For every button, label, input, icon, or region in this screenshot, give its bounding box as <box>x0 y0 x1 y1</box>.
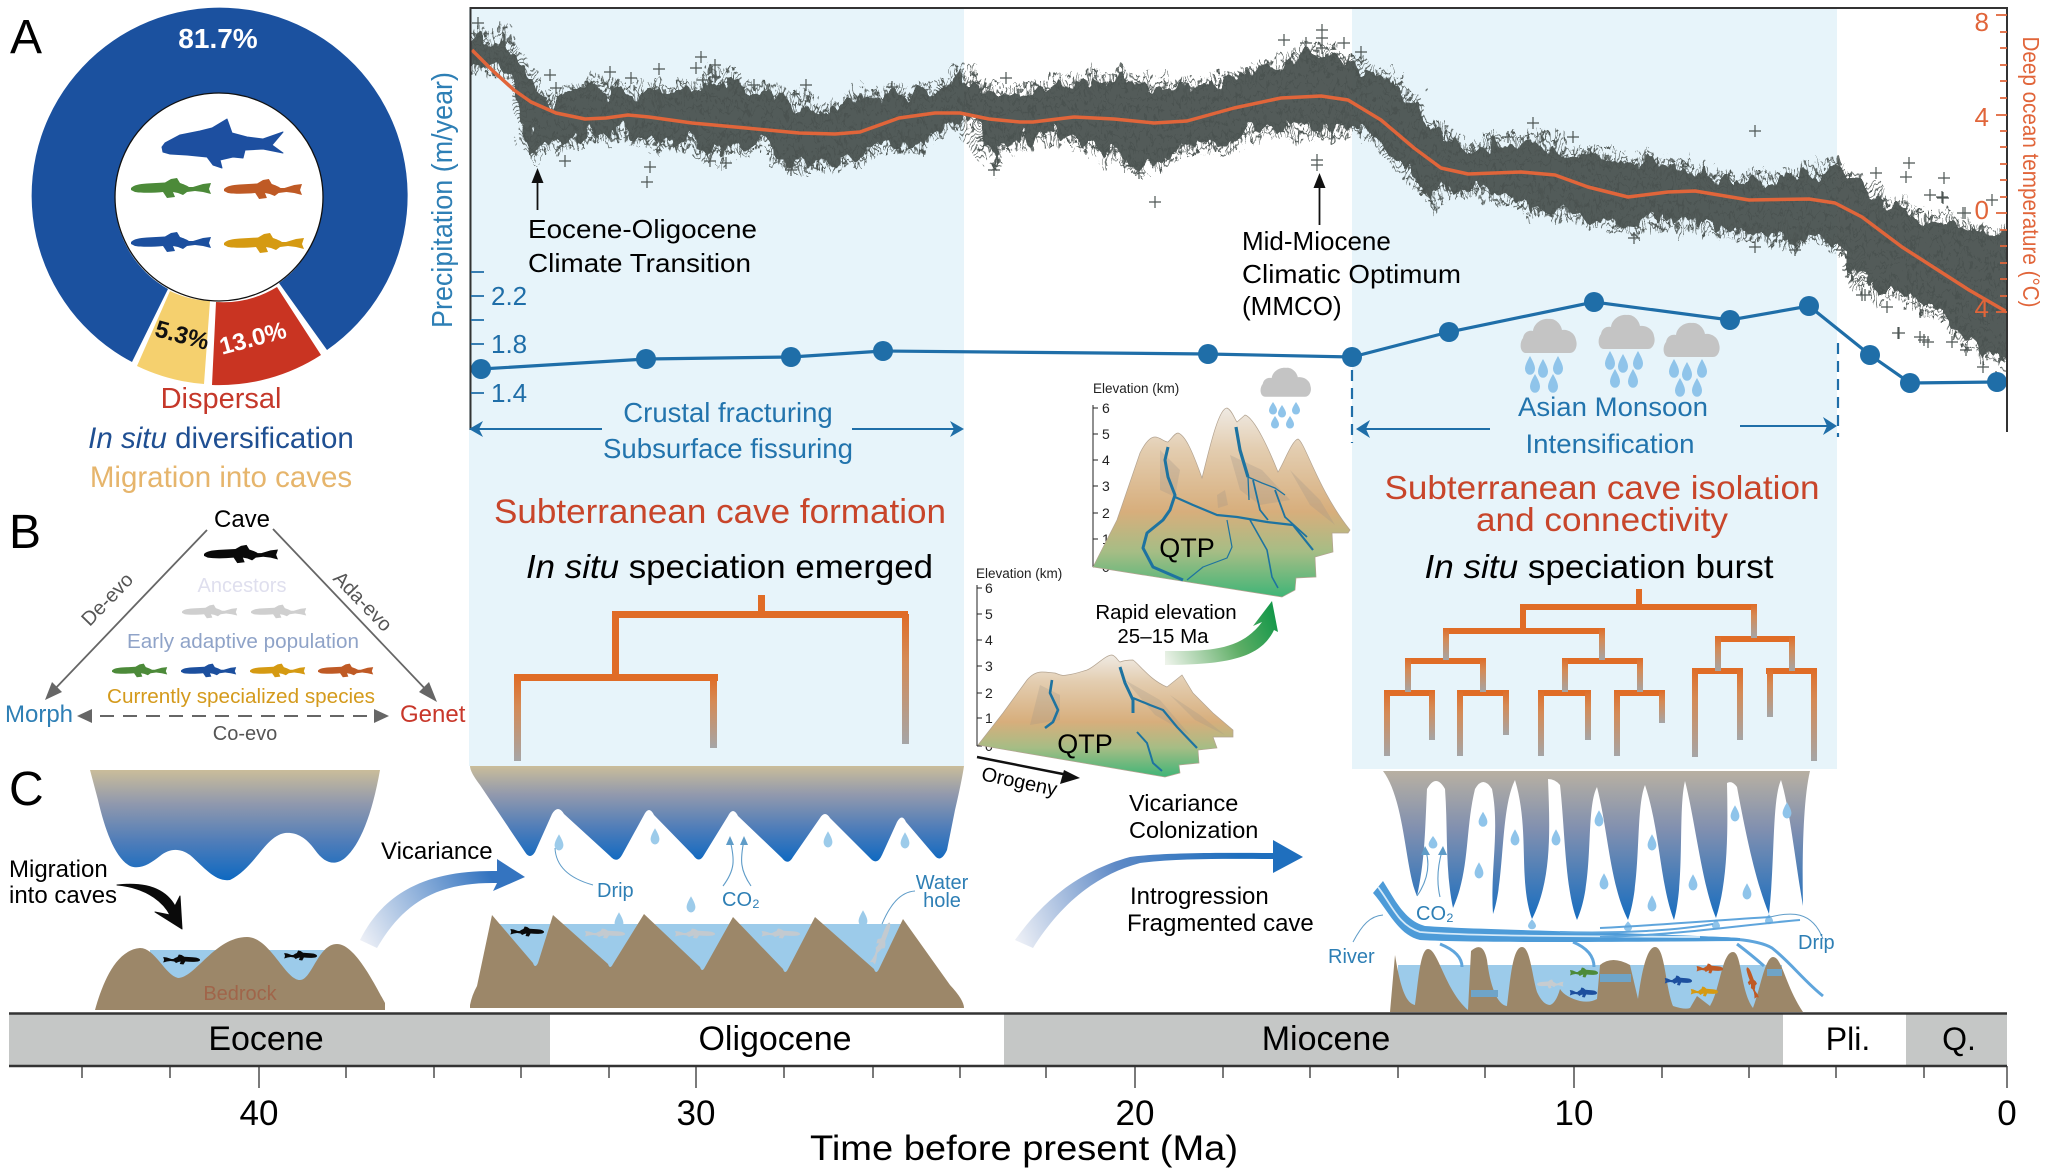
elevation axis: 2 <box>985 685 993 701</box>
bedrock <box>470 914 964 1008</box>
panel A: donut chart and legend <box>10 8 408 494</box>
chart frame <box>470 8 2007 432</box>
elevation axis: 2 <box>1102 505 1110 521</box>
temperature axis <box>1975 7 2007 323</box>
elevation axis: Elevation (km) <box>1093 381 1179 396</box>
percent label 81.7: 81.7% <box>178 23 258 54</box>
donut wedge: migration into caves 5.3% <box>137 291 210 384</box>
arrow: vicariance <box>360 838 525 948</box>
arrow: Ada-evo <box>273 529 437 702</box>
annotation: Mid-Miocene Climatic Optimum: Mid-Miocene <box>1242 226 1391 256</box>
icon: large blue fish <box>162 119 283 168</box>
elevation axis: 1 <box>1102 531 1110 547</box>
icons: specialized fish <box>112 664 373 677</box>
time axis labels: 0 <box>1997 1094 2017 1133</box>
icon: green fish <box>131 178 211 198</box>
shaded period: cave formation <box>469 8 964 766</box>
arrow: migration <box>117 884 182 929</box>
legend: dispersal: Dispersal <box>161 383 281 415</box>
percent label 5.3: 5.3% <box>152 316 212 356</box>
label: bedrock: Bedrock <box>203 983 278 1005</box>
fish in water <box>1537 964 1761 999</box>
heading: subterranean cave isolation: and connectivity <box>1476 502 1728 539</box>
panel: uplift of the plateau, lower mountain <box>976 566 1278 801</box>
donut centre circle <box>115 93 323 301</box>
arrow: rapid elevation <box>1165 601 1278 665</box>
ridge shading <box>1030 680 1225 735</box>
text: introgression fragmented cave: Fragmented cave <box>1127 910 1314 937</box>
arrow: orogeny: Orogeny <box>979 763 1059 801</box>
span arrow: crustal fracturing: Crustal fracturing <box>623 397 833 428</box>
time axis labels: 30 <box>677 1094 715 1133</box>
temperature axis: 8 <box>1975 7 1989 37</box>
span arrow: Asian monsoon intensification <box>1352 343 1838 459</box>
time axis labels: 40 <box>240 1094 278 1133</box>
epoch: Miocene <box>1004 1013 1783 1066</box>
precipitation axis: 2.2 <box>491 281 527 311</box>
icon: rain cloud <box>1261 368 1311 428</box>
label: water hole <box>882 872 969 924</box>
icon: rain clouds <box>1521 315 1720 397</box>
elevation axis: 5 <box>985 606 993 622</box>
label: QTP: QTP <box>1057 729 1113 759</box>
mountain silhouette <box>978 655 1233 777</box>
legend: in situ diversification: In situ diversification <box>88 422 354 455</box>
panel letter A: A <box>10 11 42 64</box>
temperature trend curve <box>472 50 2007 312</box>
label: rapid elevation <box>1095 601 1237 648</box>
epoch: Oligocene: Oligocene <box>698 1020 852 1058</box>
elevation axis: 4 <box>1102 452 1110 468</box>
label: Ancestors: Ancestors <box>198 575 286 597</box>
arrow: Co-evo <box>77 709 389 723</box>
elevation axis <box>976 566 1062 754</box>
label: Co-evo: Co-evo <box>213 723 277 745</box>
label: water hole: hole <box>923 890 961 912</box>
icons: ancestor fish <box>182 605 306 618</box>
label: De-evo: De-evo <box>77 569 138 631</box>
temperature axis: 4 <box>1975 102 1989 132</box>
donut wedge: in situ diversification 81.7% <box>32 8 408 362</box>
precipitation line and points <box>471 292 2007 393</box>
icons: grey fish <box>585 921 895 965</box>
epoch: Quaternary <box>1906 1013 2007 1066</box>
label: Genet: Genet <box>400 701 466 728</box>
label: drip <box>555 848 634 902</box>
arrow: vicariance and colonization <box>1015 840 1303 948</box>
precipitation axis <box>471 272 527 408</box>
elevation axis: 0 <box>1102 559 1110 575</box>
panel: climate chart <box>427 7 2044 769</box>
precipitation axis: 1.8 <box>491 329 527 359</box>
bedrock <box>95 937 385 1010</box>
text: vicariance colonization: Vicariance <box>1129 790 1238 816</box>
annotation: Mid-Miocene Climatic Optimum <box>1242 173 1461 321</box>
span arrow: Asian monsoon intensification: Asian Monsoon <box>1518 392 1708 422</box>
label: QTP: QTP <box>1159 533 1215 563</box>
elevation axis: 3 <box>985 658 993 674</box>
label: Early adaptive population: Early adaptive population <box>127 630 359 653</box>
shaded period: isolation and connectivity <box>1352 8 1837 769</box>
rivers <box>1045 667 1197 771</box>
phylogenetic tree <box>1384 589 1817 761</box>
label: rapid elevation: Rapid elevation <box>1095 601 1237 624</box>
epoch: Miocene: Miocene <box>1262 1020 1390 1058</box>
donut wedge: dispersal 13.0% <box>212 287 321 385</box>
temperature axis: 4 <box>1975 293 1989 323</box>
annotation: Mid-Miocene Climatic Optimum: Climatic Optimum <box>1242 259 1461 289</box>
label: Morph: Morph <box>5 701 73 728</box>
timeline: geological epochs <box>9 1013 2017 1168</box>
elevation axis: 5 <box>1102 426 1110 442</box>
label: CO2 with arrows <box>722 836 760 911</box>
icon: yellow fish <box>224 233 304 253</box>
text: vicariance colonization: Colonization <box>1129 817 1258 843</box>
ridge shading <box>1160 450 1335 525</box>
label: Drip: Drip <box>1798 932 1835 954</box>
elevation axis: 1 <box>985 710 993 726</box>
water pool <box>492 924 903 976</box>
heading: subterranean cave isolation <box>1384 470 1820 539</box>
subheading: speciation burst: In situ speciation burst <box>1424 548 1774 585</box>
elevation axis: 6 <box>985 580 993 596</box>
time axis labels: 20 <box>1116 1094 1154 1133</box>
label: CO2 with arrows <box>1416 846 1454 925</box>
text: vicariance colonization <box>1129 790 1258 843</box>
subheading: speciation emerged: In situ speciation emerged <box>526 548 933 585</box>
phylogenetic tree <box>514 595 909 761</box>
water pool <box>150 950 325 984</box>
bedrock pillars <box>1390 947 1803 1012</box>
river <box>1373 881 1823 996</box>
span arrow: crustal fracturing <box>469 397 964 464</box>
water drops <box>555 828 909 928</box>
epoch: Pliocene: Pli. <box>1826 1021 1870 1057</box>
percent label 13.0: 13.0% <box>217 317 289 361</box>
panel: cave formation stage <box>470 493 969 1008</box>
elevation axis: 4 <box>985 632 993 648</box>
time axis labels <box>240 1094 2017 1133</box>
panel C: cave stage 1 <box>9 763 385 1010</box>
text: introgression fragmented cave <box>1127 883 1314 937</box>
legend: migration into caves: Migration into caves <box>90 461 352 494</box>
span arrow: Asian monsoon intensification: Intensification <box>1526 429 1694 459</box>
cave ceiling <box>90 770 380 880</box>
epoch: Quaternary: Q. <box>1942 1021 1976 1057</box>
arrow: vicariance: Vicariance <box>381 838 493 865</box>
panel letter B: B <box>9 506 41 559</box>
label: CO2 with arrows: CO₂ <box>1416 903 1454 925</box>
precipitation axis title: Precipitation (m/year) <box>427 72 459 328</box>
epoch: Eocene <box>9 1013 550 1066</box>
panel B: evolution triangle <box>5 506 466 745</box>
rivers <box>1143 427 1313 588</box>
panel: uplift of the Qinghai-Tibet plateau, upper mountain <box>1093 368 1350 597</box>
icon: blue fish <box>131 232 211 252</box>
temperature axis title: Deep ocean temperature (°C) <box>2018 36 2044 308</box>
icon: black fish <box>510 926 544 936</box>
label: water hole: Water <box>916 872 969 894</box>
label: drip: Drip <box>597 880 634 902</box>
label: River: River <box>1328 946 1375 968</box>
heading: subterranean cave isolation: Subterranean cave isolation <box>1384 470 1820 507</box>
annotation: Eocene-Oligocene transition <box>528 168 757 278</box>
connecting water bands <box>1471 969 1782 997</box>
annotation: Eocene-Oligocene transition: Eocene-Oligocene <box>528 214 757 244</box>
label: Drip <box>1770 914 1835 954</box>
panel letter C: C <box>9 763 44 816</box>
panel: cave isolation stage <box>1328 470 1835 1012</box>
precipitation axis: 1.4 <box>491 378 527 408</box>
elevation axis: 3 <box>1102 478 1110 494</box>
elevation axis: 0 <box>985 738 993 754</box>
icons: black fish <box>163 950 317 964</box>
label: CO2 with arrows: CO₂ <box>722 889 760 911</box>
elevation axis <box>1093 381 1179 575</box>
icon: black cave fish <box>204 545 278 563</box>
time axis title: Time before present (Ma) <box>810 1129 1238 1168</box>
time axis labels: 10 <box>1555 1094 1593 1133</box>
label: rapid elevation: 25–15 Ma <box>1117 625 1209 648</box>
arrow: De-evo <box>45 530 207 700</box>
label: migration into caves: into caves <box>9 882 117 909</box>
elevation axis: Elevation (km) <box>976 566 1062 581</box>
water pool <box>1398 965 1782 1010</box>
span arrow: crustal fracturing: Subsurface fissuring <box>603 433 853 464</box>
epoch: Eocene: Eocene <box>208 1020 324 1058</box>
icon: orange fish <box>224 179 302 199</box>
annotation: Mid-Miocene Climatic Optimum: (MMCO) <box>1242 291 1342 321</box>
annotation: Eocene-Oligocene transition: Climate Transition <box>528 248 751 278</box>
text: introgression fragmented cave: Introgression <box>1130 883 1269 910</box>
deep ocean temperature scatter <box>450 17 2030 383</box>
label: River <box>1328 915 1383 968</box>
elevation axis: 6 <box>1102 400 1110 416</box>
arrow: orogeny <box>977 757 1080 801</box>
label: migration into caves: Migration <box>9 856 108 883</box>
cave ceiling <box>470 766 964 862</box>
label: Ada-evo: Ada-evo <box>329 567 396 636</box>
temperature axis: 0 <box>1975 195 1989 225</box>
water drops <box>1429 802 1791 931</box>
label: Currently specialized species: Currently specialized species <box>107 685 375 708</box>
mountain silhouette <box>1093 408 1350 597</box>
heading: subterranean cave formation: Subterranean cave formation <box>494 493 946 531</box>
time axis ticks <box>82 1066 2007 1088</box>
label: Cave: Cave <box>214 506 270 533</box>
cave stalactites <box>1383 771 1810 920</box>
